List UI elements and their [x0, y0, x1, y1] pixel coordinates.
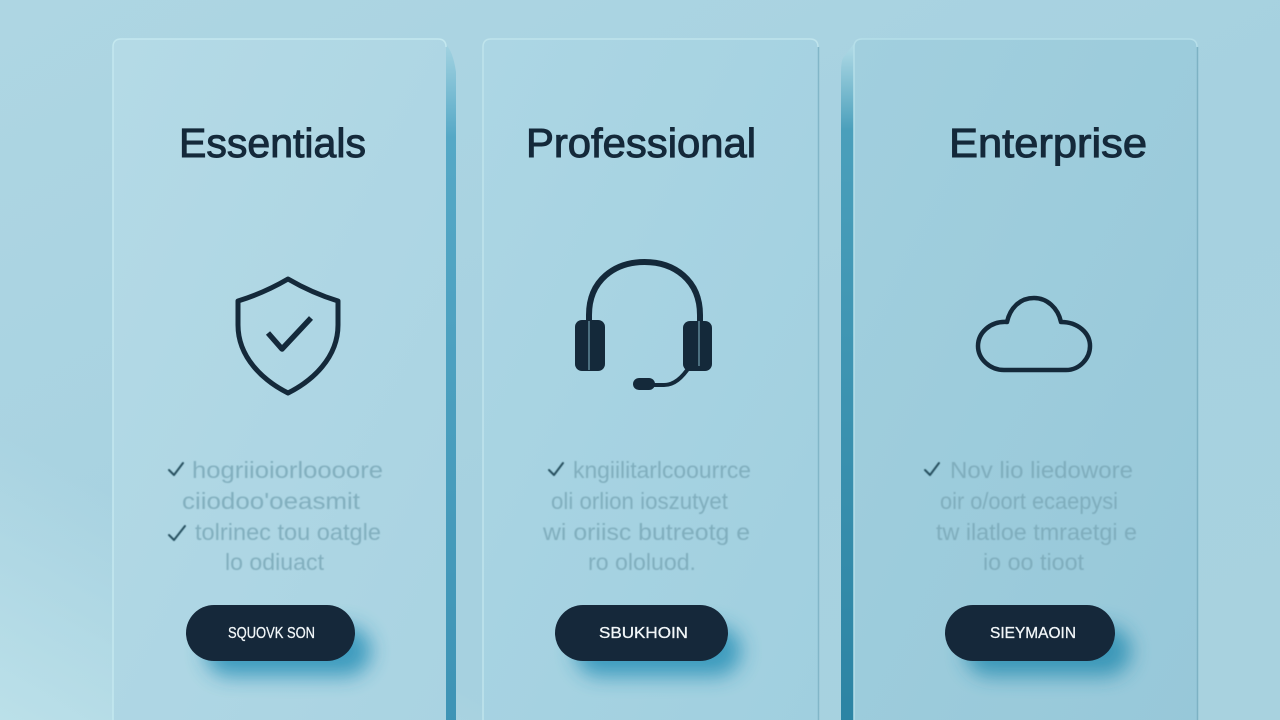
feature list: wi oriisc butreotg e [542, 519, 750, 545]
panel: Professional [483, 39, 818, 720]
feature list: tw ilatloe tmraetgi e [936, 519, 1137, 545]
feature list: hogriioiorloooore [192, 457, 383, 483]
feature list: Nov lio liedowore [950, 457, 1133, 483]
icon: shield with check [238, 279, 338, 393]
heading: Professional: Professional [526, 120, 756, 166]
button [555, 605, 741, 676]
feature list [925, 457, 1137, 575]
panel: Enterprise [841, 39, 1198, 720]
button [186, 605, 371, 676]
feature list: tolrinec tou oatgle [195, 519, 381, 545]
panel: Essentials [113, 39, 456, 720]
feature list: ciiodoo'oeasmit [182, 488, 361, 514]
feature list [169, 457, 383, 575]
heading: Essentials: Essentials [179, 120, 366, 166]
feature list: lo odiuact [225, 549, 325, 575]
feature list: io oo tioot [983, 549, 1085, 575]
button [945, 605, 1131, 676]
icon: cloud [978, 298, 1090, 370]
heading: Enterprise: Enterprise [949, 120, 1147, 166]
button: SIEYMAOIN [990, 625, 1076, 642]
feature list: oli orlion ioszutyet [551, 488, 729, 514]
feature list: oir o/oort ecaepysi [940, 488, 1118, 514]
feature list: ro ololuod. [588, 549, 696, 575]
icon: headset [575, 262, 712, 390]
feature list [542, 457, 751, 575]
button: SQUOVK SON [228, 625, 315, 642]
feature list: kngiilitarlcoourrce [573, 457, 751, 483]
button: SBUKHOIN [599, 625, 688, 642]
